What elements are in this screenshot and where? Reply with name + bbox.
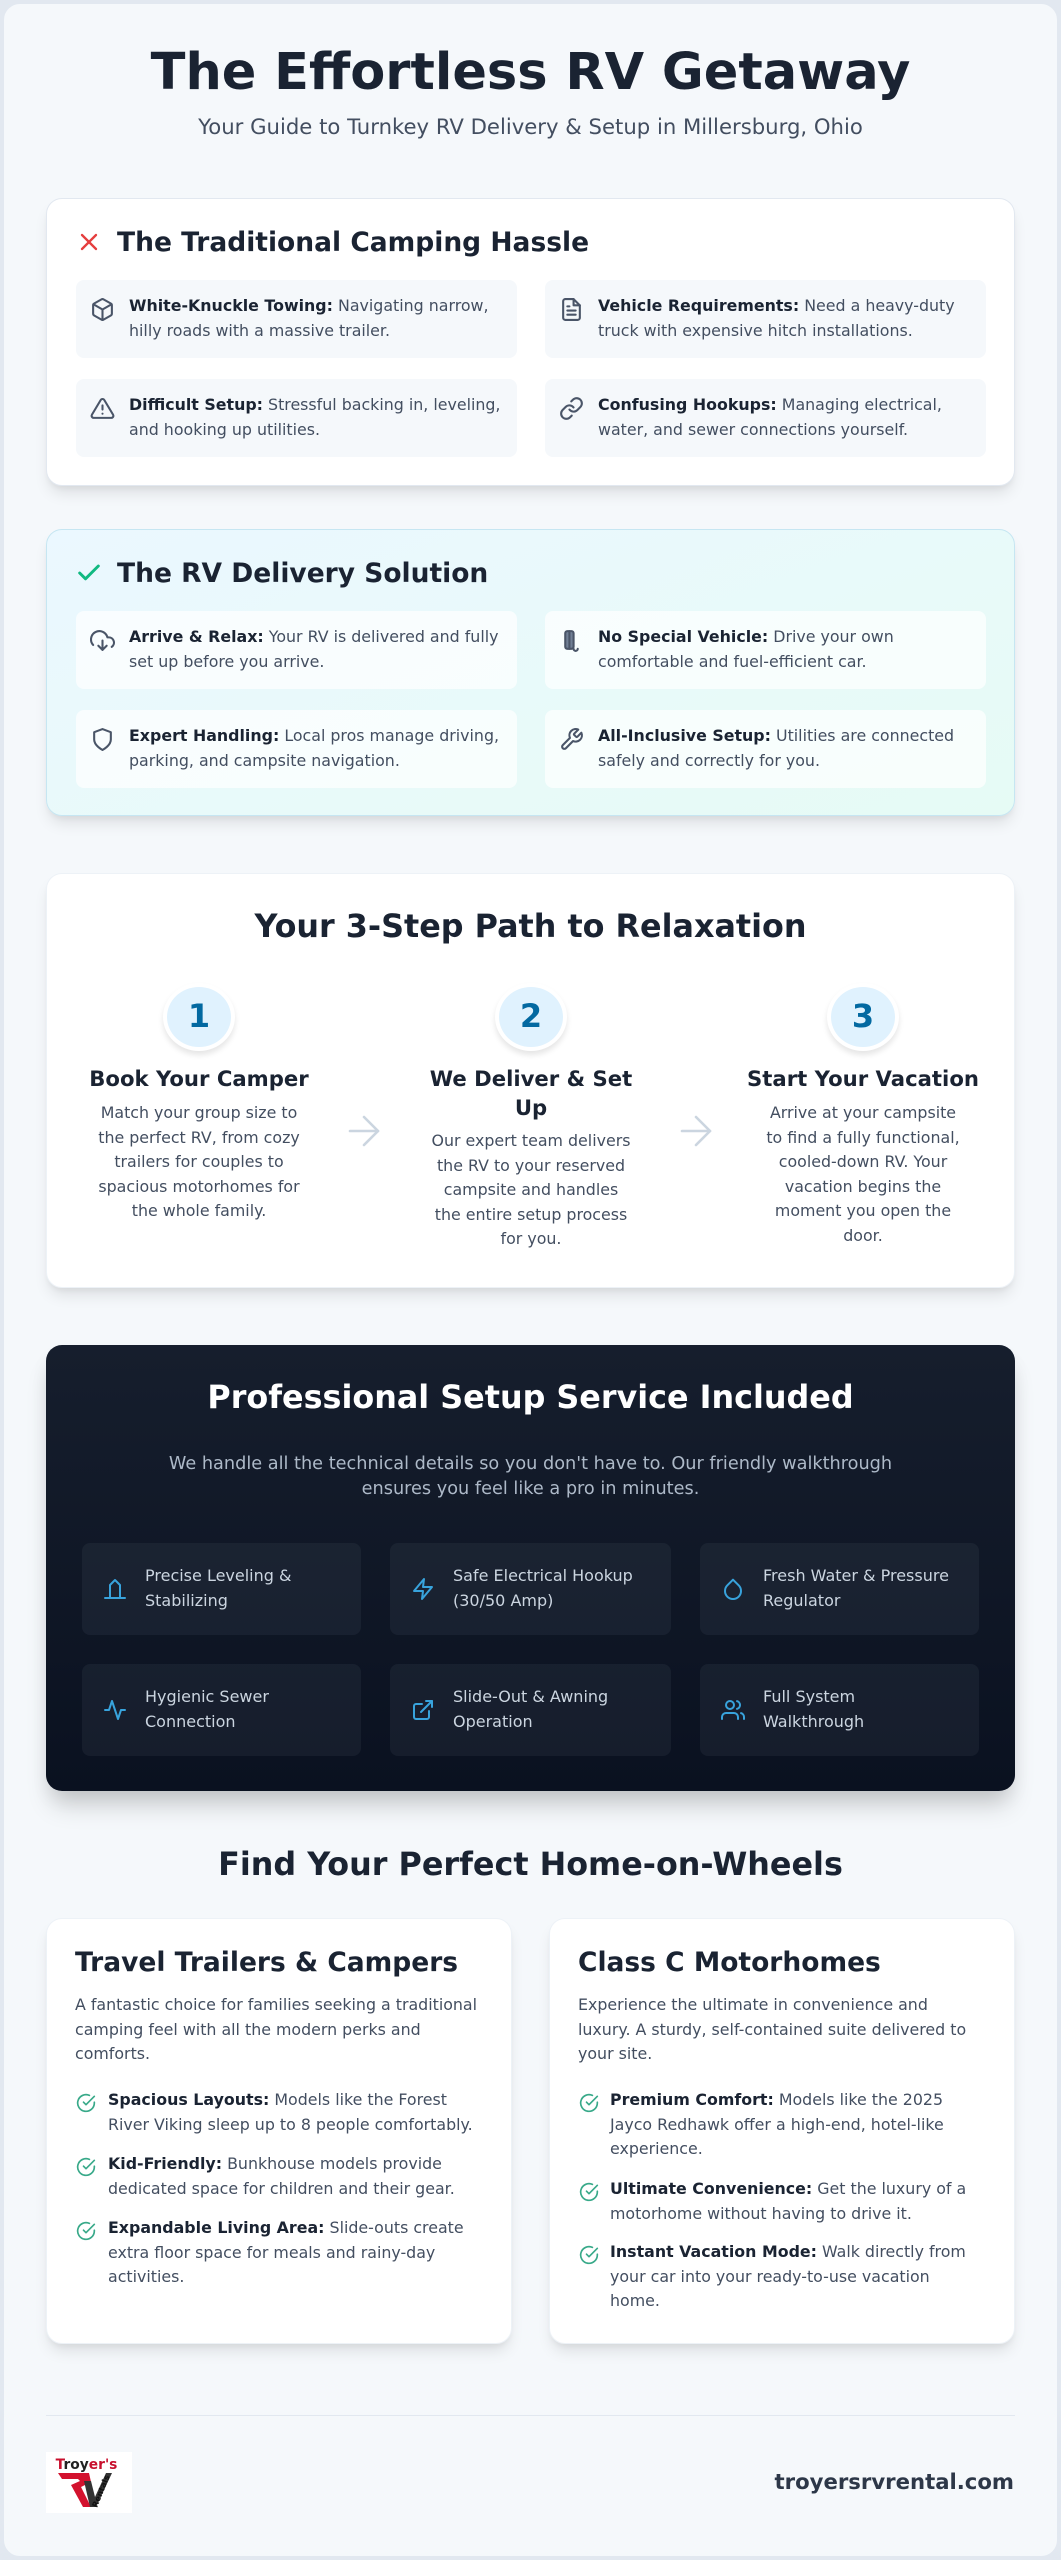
text: white-knuckle towing: hilly roads with a massive trailer.: [129, 320, 390, 340]
text: slide-out: [453, 1687, 608, 1730]
text: premium comfort: [610, 2088, 944, 2162]
step 3 text: vacation begins the: [785, 1176, 941, 1196]
card: travel trailers: [46, 1918, 512, 2344]
step 2 text: the RV to your reserved: [437, 1156, 625, 1174]
card: class c motorhomes: [549, 1918, 1015, 2344]
icon: green check: [78, 564, 100, 580]
icon: cloud download: [90, 630, 115, 651]
heading: hassle: The Traditional Camping Hassle: [117, 227, 589, 258]
text: sewer: [145, 1687, 269, 1730]
step 2 text: for you.: [501, 1229, 561, 1248]
card intro: A fantastic choice for families seeking a traditional: [75, 1995, 477, 2014]
icon: shield: [93, 728, 112, 751]
text: walkthrough: Full System: [763, 1687, 855, 1706]
text: no special vehicle: [598, 627, 894, 670]
card intro: [578, 1993, 966, 2066]
logo: Troyer's: [56, 2457, 117, 2473]
icon: check circle: [579, 2093, 599, 2113]
item: no special vehicle: [545, 611, 986, 689]
text: premium comfort: Jayco Redhawk offer a high-end, hotel-like: [610, 2114, 944, 2134]
step 2 text: the entire setup process: [435, 1204, 627, 1224]
step 3: [747, 987, 979, 1244]
list item: ultimate convenience: [579, 2177, 999, 2227]
subtitle: Your Guide to Turnkey RV Delivery & Setup in Millersburg, Ohio: [198, 114, 863, 139]
text: walkthrough: Walkthrough: [763, 1712, 864, 1730]
icon: zap: [413, 1578, 433, 1600]
text: slide-out: Slide-Out & Awning: [453, 1687, 608, 1706]
icon: leveling: [104, 1579, 126, 1599]
text: confusing hookups: [598, 395, 942, 438]
text: confusing hookups: Confusing Hookups: Managing electrical,: [598, 395, 942, 414]
text: expert handling: Expert Handling: Local pros manage driving,: [129, 726, 499, 745]
text: premium comfort: Premium Comfort: Models like the 2025: [610, 2090, 943, 2109]
list item: spacious layouts: [76, 2088, 496, 2138]
text: expert handling: [129, 726, 499, 770]
step 1 text: [98, 1103, 300, 1220]
text: leveling: [145, 1566, 291, 1610]
text: expert handling: parking, and campsite navigation.: [129, 750, 400, 770]
text: slide-out: Operation: [453, 1712, 533, 1730]
step 3 title: Start Your Vacation: [747, 1066, 979, 1091]
text: expandable living: [108, 2216, 464, 2290]
icon: file: [562, 298, 581, 321]
text: no special vehicle: comfortable and fuel-efficient car.: [598, 652, 867, 670]
text: vehicle requirements: truck with expensive hitch installations.: [598, 320, 913, 340]
text: instant vacation: Instant Vacation Mode: Walk directly from: [610, 2242, 966, 2261]
list item: kid-friendly: [76, 2152, 496, 2202]
icon: warning triangle: [90, 398, 114, 419]
intro text: [169, 1454, 892, 1499]
text: fresh water: Regulator: [763, 1590, 840, 1610]
text: expandable living: Expandable Living Area: Slide-outs create: [108, 2218, 464, 2237]
text: leveling: Stabilizing: [145, 1590, 228, 1610]
step 2: [430, 987, 632, 1248]
icon: wrench: [561, 728, 583, 750]
number badge 1: 1: [188, 997, 210, 1035]
logo: [46, 2452, 132, 2513]
text: instant vacation: home.: [610, 2291, 660, 2310]
step 1 title: Book Your Camper: [89, 1066, 309, 1091]
item: all-inclusive setup: [545, 710, 986, 788]
text: sewer: Connection: [145, 1712, 236, 1730]
text: expandable living: extra floor space for meals and rainy-day: [108, 2242, 435, 2262]
card title: Travel Trailers & Campers: [75, 1947, 458, 1978]
step 2 title: Up: [515, 1095, 547, 1120]
icon: activity: [104, 1700, 126, 1720]
text: sewer: Hygienic Sewer: [145, 1687, 269, 1706]
panel: 3-step path: [46, 873, 1015, 1288]
title: The Effortless RV Getaway: [151, 43, 910, 102]
text: difficult setup: Difficult Setup: Stressful backing in, leveling,: [129, 395, 500, 414]
text: difficult setup: and hooking up utilities.: [129, 420, 320, 438]
text: vehicle requirements: Vehicle Requirements: Need a heavy-duty: [598, 296, 955, 315]
card title: Class C Motorhomes: [578, 1947, 881, 1978]
list item: premium comfort: [579, 2088, 999, 2162]
text: leveling: Precise Leveling &: [145, 1566, 291, 1585]
step 1 text: the whole family.: [132, 1201, 266, 1220]
text: spacious layouts: [108, 2088, 473, 2137]
step 1 text: trailers for couples to: [114, 1152, 284, 1171]
text: white-knuckle towing: [129, 296, 489, 340]
item: expert handling: [76, 710, 517, 788]
text: ultimate convenience: Ultimate Convenience: Get the luxury of a: [610, 2179, 966, 2198]
step 3 text: cooled-down RV. Your: [779, 1152, 947, 1171]
website address: troyersrvrental.com: [775, 2469, 1014, 2494]
text: kid-friendly: [108, 2152, 455, 2201]
icon: droplet: [724, 1578, 742, 1600]
card intro: your site.: [578, 2044, 652, 2063]
step 3 text: Arrive at your campsite: [770, 1103, 956, 1122]
number badge 2: [495, 983, 567, 1051]
panel: traditional camping hassle: [46, 198, 1015, 486]
item: white-knuckle towing: [76, 280, 517, 358]
footer rule: [46, 2415, 1015, 2416]
text: fresh water: [763, 1566, 949, 1610]
item: confusing hookups: [545, 379, 986, 457]
list item: instant vacation: [579, 2240, 999, 2314]
step 3 text: to find a fully functional,: [766, 1128, 960, 1146]
step 2 text: Our expert team delivers: [432, 1131, 630, 1150]
text: all-inclusive setup: [598, 726, 954, 770]
icon: link: [560, 397, 583, 420]
text: expandable living: activities.: [108, 2267, 184, 2286]
item: electrical: [390, 1543, 671, 1635]
icon: vehicle: [564, 630, 579, 652]
text: walkthrough: [763, 1687, 864, 1730]
list item: expandable living: [76, 2216, 496, 2290]
text: kid-friendly: dedicated space for children and their gear.: [108, 2178, 455, 2198]
text: all-inclusive setup: safely and correctly for you.: [598, 750, 820, 770]
text: premium comfort: experience.: [610, 2139, 703, 2158]
icon: users: [721, 1700, 745, 1720]
icon: check circle: [76, 2157, 96, 2177]
icon: red x: [80, 234, 98, 250]
card intro: luxury. A sturdy, self-contained suite delivered to: [578, 2020, 966, 2038]
heading: 3-step path: Your 3-Step Path to Relaxation: [254, 908, 807, 945]
number badge 1: [163, 983, 235, 1051]
heading: solution: The RV Delivery Solution: [117, 558, 488, 589]
card intro: comforts.: [75, 2044, 150, 2063]
icon: external link: [413, 1700, 433, 1720]
item: fresh water: [700, 1543, 979, 1635]
item: slide-out: [390, 1664, 671, 1756]
item: difficult setup: [76, 379, 517, 457]
number badge 2: 2: [520, 997, 542, 1035]
text: arrive and relax: Arrive & Relax: Your RV is delivered and fully: [129, 627, 498, 646]
step 3 text: [766, 1103, 960, 1244]
text: electrical: Safe Electrical Hookup: [453, 1566, 633, 1585]
item: vehicle requirements: [545, 280, 986, 358]
text: white-knuckle towing: White-Knuckle Towing: Navigating narrow,: [129, 296, 489, 315]
step 1: [89, 987, 309, 1220]
text: all-inclusive setup: All-Inclusive Setup: Utilities are connected: [598, 726, 954, 745]
text: ultimate convenience: [610, 2177, 966, 2226]
text: kid-friendly: Kid-Friendly: Bunkhouse models provide: [108, 2154, 442, 2173]
text: ultimate convenience: motorhome without having to drive it.: [610, 2204, 912, 2222]
text: instant vacation: your car into your ready-to-use vacation: [610, 2266, 930, 2286]
step 1 text: spacious motorhomes for: [98, 1176, 300, 1196]
heading: find your perfect home: Find Your Perfect Home-on-Wheels: [218, 1846, 843, 1883]
text: electrical: (30/50 Amp): [453, 1590, 553, 1610]
text: arrive and relax: set up before you arrive.: [129, 652, 324, 670]
item: leveling: [82, 1543, 361, 1635]
item: sewer: [82, 1664, 361, 1756]
text: arrive and relax: [129, 627, 498, 670]
icon: check circle: [579, 2182, 599, 2202]
card intro: Experience the ultimate in convenience and: [578, 1995, 928, 2014]
step 3 text: door.: [843, 1226, 883, 1244]
heading: setup service: Professional Setup Service Included: [207, 1379, 854, 1416]
panel: rv delivery solution: [46, 529, 1015, 816]
item: arrive and relax: [76, 611, 517, 689]
card intro: [75, 1993, 477, 2066]
intro text: We handle all the technical details so you don't have to. Our friendly walkthrough: [169, 1454, 892, 1474]
step 3 text: moment you open the: [775, 1201, 951, 1220]
text: confusing hookups: water, and sewer connections yourself.: [598, 420, 908, 438]
step 2 text: [432, 1131, 630, 1248]
item: walkthrough: [700, 1664, 979, 1756]
step 1 text: the perfect RV, from cozy: [98, 1128, 300, 1146]
text: spacious layouts: River Viking sleep up to 8 people comfortably.: [108, 2114, 473, 2134]
text: spacious layouts: Spacious Layouts: Models like the Forest: [108, 2090, 447, 2109]
number badge 3: [827, 983, 899, 1051]
text: no special vehicle: No Special Vehicle: Drive your own: [598, 627, 894, 646]
arrow 1: [348, 1116, 380, 1146]
intro text: ensures you feel like a pro in minutes.: [362, 1479, 699, 1499]
panel: professional setup service: [46, 1345, 1015, 1791]
arrow 2: [680, 1116, 712, 1146]
icon: check circle: [76, 2221, 96, 2241]
text: difficult setup: [129, 395, 500, 438]
icon: box: [92, 298, 113, 321]
step 2 text: campsite and handles: [444, 1180, 618, 1199]
text: electrical: [453, 1566, 633, 1610]
logo: Rentals: [91, 2474, 112, 2509]
step 1 text: Match your group size to: [101, 1103, 297, 1122]
step 2 title: [430, 1066, 632, 1120]
step 2 title: We Deliver & Set: [430, 1066, 632, 1091]
number badge 3: 3: [852, 997, 874, 1035]
text: fresh water: Fresh Water & Pressure: [763, 1566, 949, 1585]
text: instant vacation: [610, 2240, 966, 2314]
icon: check circle: [579, 2245, 599, 2265]
card intro: camping feel with all the modern perks and: [75, 2020, 421, 2038]
text: vehicle requirements: [598, 296, 955, 340]
icon: check circle: [76, 2093, 96, 2113]
